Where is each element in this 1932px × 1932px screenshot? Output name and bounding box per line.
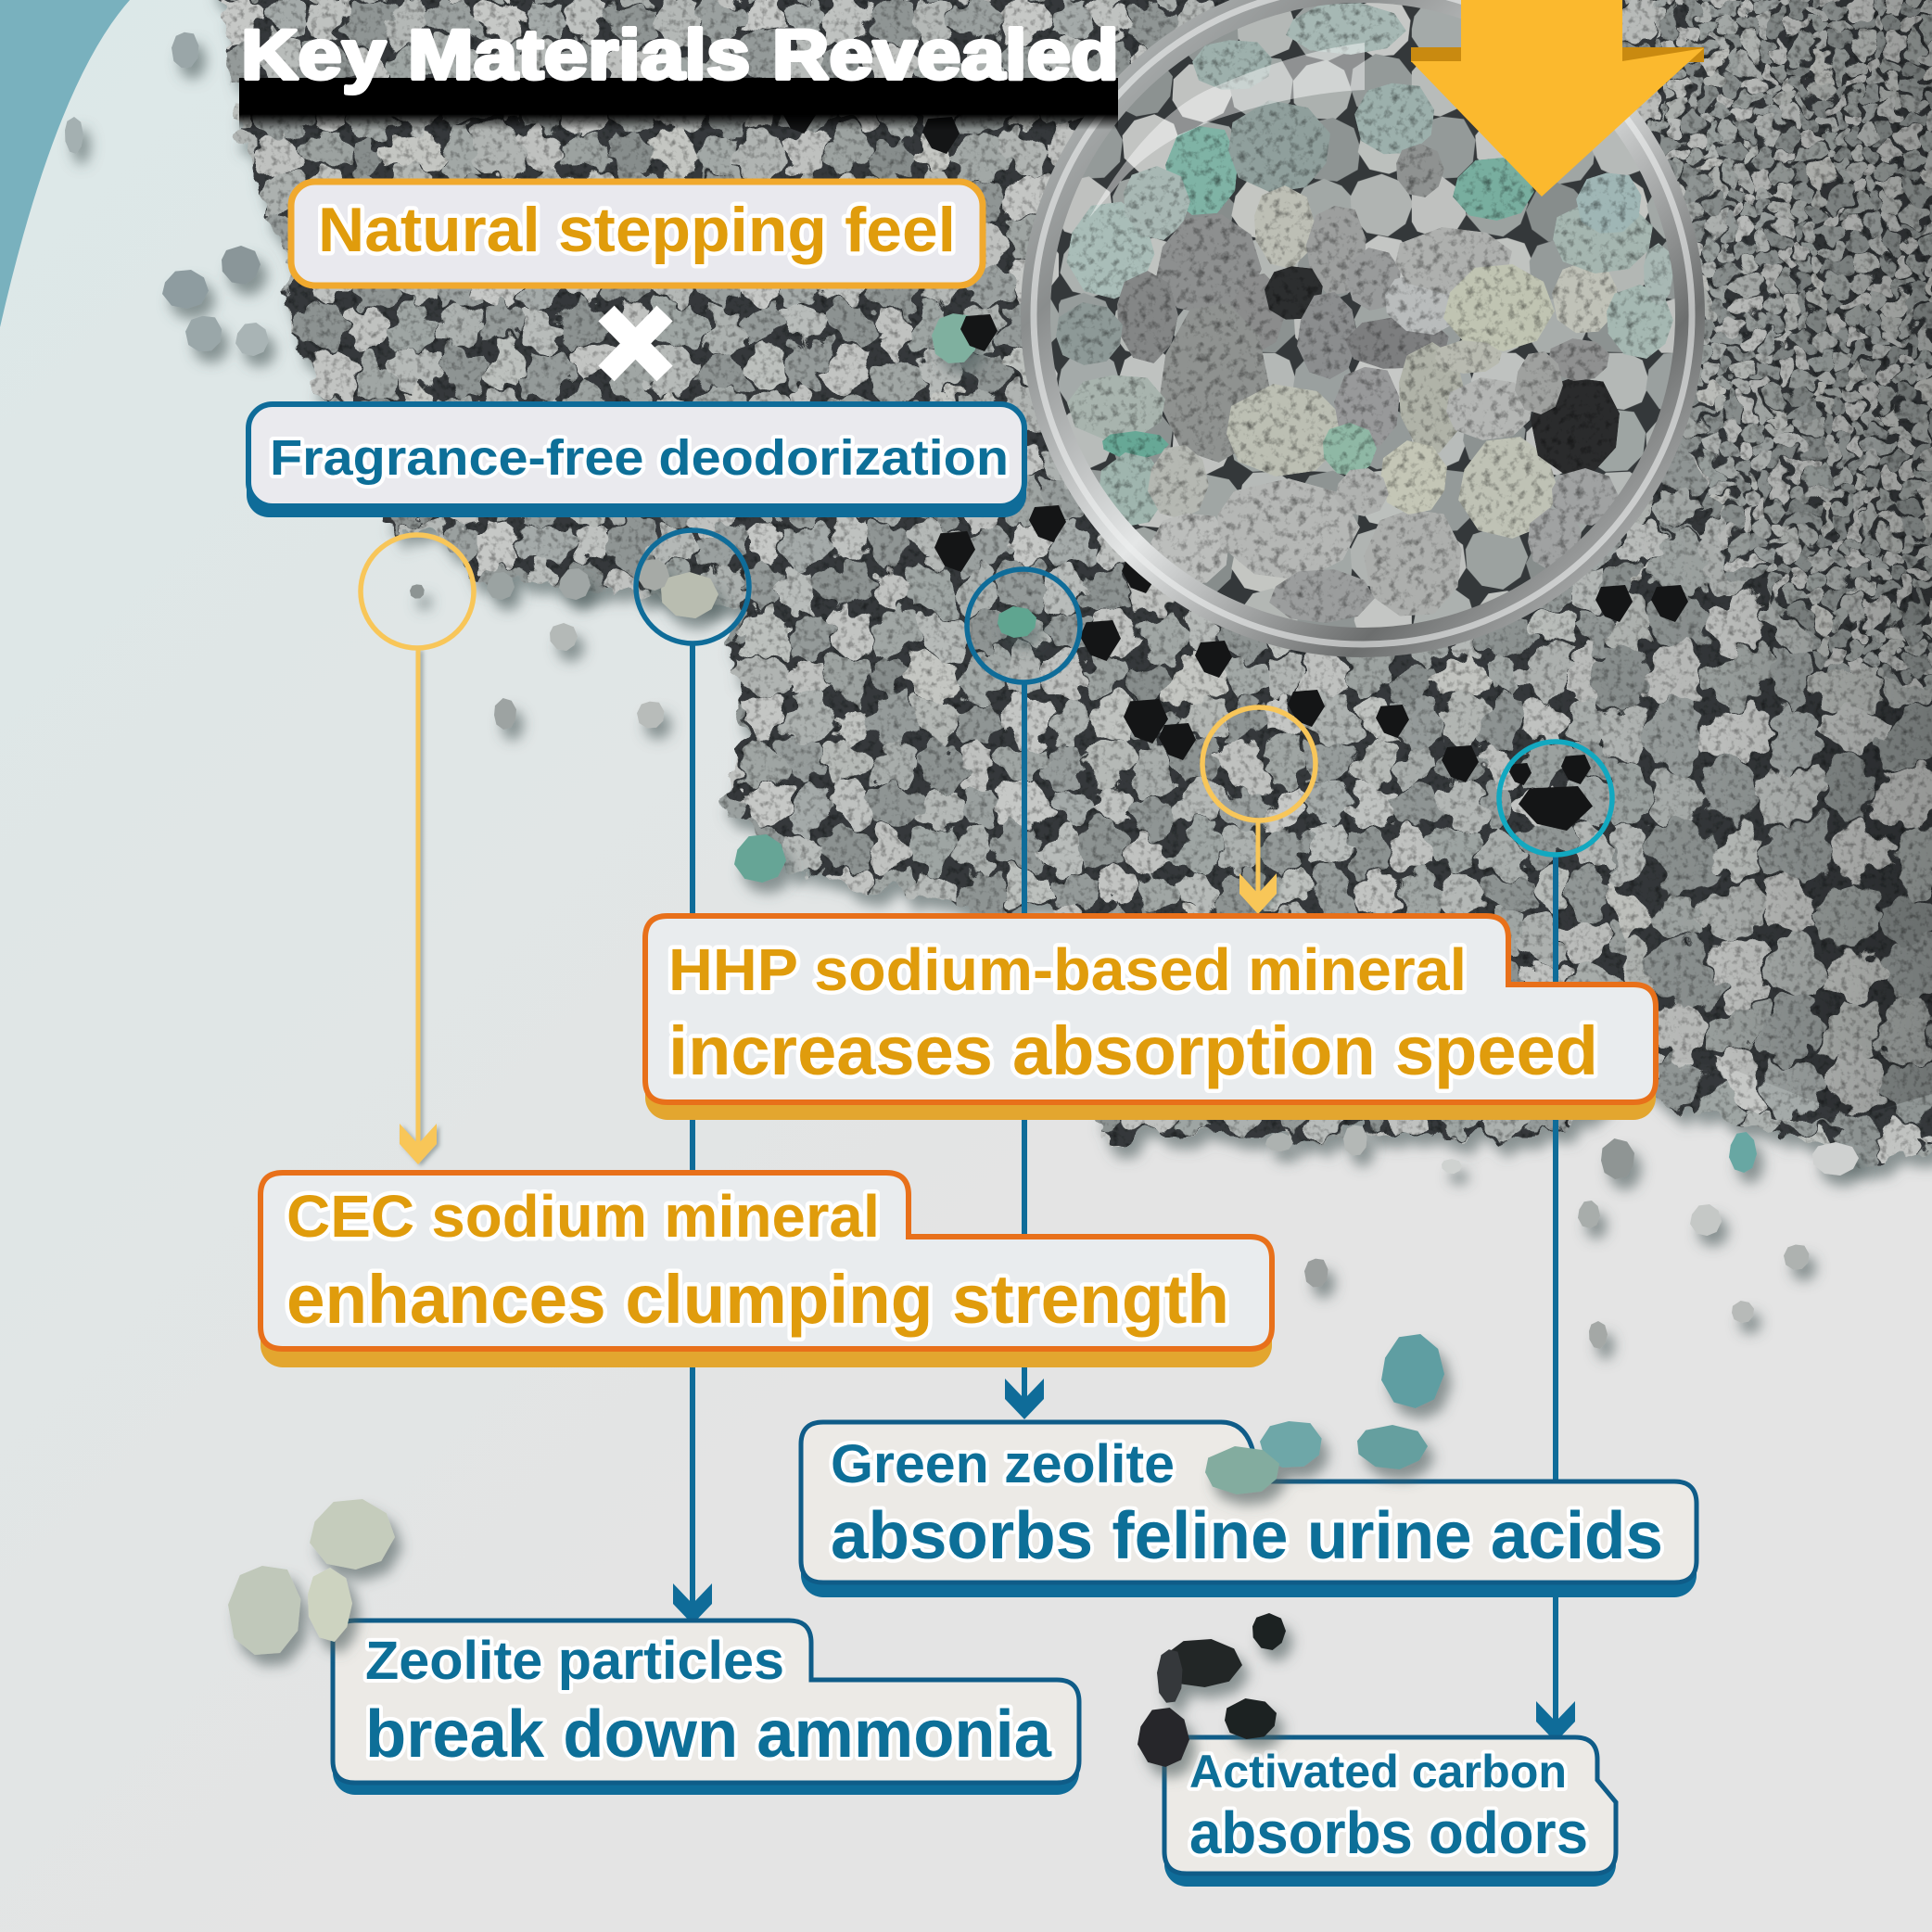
- sample stones: pale zeolite: [228, 1499, 395, 1655]
- title band: [239, 78, 1118, 130]
- sample stones: activated carbon: [1138, 1613, 1286, 1767]
- circle: zeolite marker: [636, 530, 749, 643]
- sample stones: green zeolite: [1205, 1334, 1444, 1494]
- callout: HHP sodium-based mineral: [645, 916, 1656, 1120]
- icon: multiply cross: [606, 313, 665, 374]
- callout: Zeolite particles: break down ammonia: [365, 1697, 1052, 1772]
- connector line: yellow to CEC sodium mineral: [400, 649, 437, 1164]
- circle: HHP mineral marker: [1202, 707, 1316, 820]
- pill: fragrance-free deodorization: [247, 404, 1026, 517]
- callout: Zeolite particles: Zeolite particles: [365, 1631, 784, 1691]
- title: Key Materials Revealed: [241, 16, 1119, 95]
- callout: Green zeolite: Green zeolite: [831, 1434, 1175, 1494]
- circle: CEC mineral marker: [361, 535, 474, 648]
- pill: natural stepping feel: Natural stepping feel: [318, 195, 956, 265]
- callout: CEC sodium mineral: [261, 1173, 1272, 1367]
- callout: Activated carbon: absorbs odors: [1189, 1799, 1588, 1866]
- circle: activated carbon marker: [1499, 742, 1612, 855]
- callout: Green zeolite: [801, 1422, 1697, 1597]
- gravel field: [210, 0, 1932, 1168]
- callout: HHP sodium-based mineral: increases absorption speed: [668, 1012, 1598, 1089]
- connector line: blue to Zeolite particles: [673, 644, 712, 1624]
- connector line: yellow to HHP sodium-based mineral: [1239, 820, 1277, 914]
- connector line: blue to Green zeolite: [1005, 681, 1044, 1419]
- callout: CEC sodium mineral: enhances clumping strength: [286, 1261, 1229, 1338]
- black carbon shards: [782, 100, 1688, 831]
- callout: Green zeolite: absorbs feline urine acids: [831, 1499, 1663, 1573]
- teal tray corner: [0, 0, 130, 327]
- callout: Activated carbon: Activated carbon: [1189, 1746, 1567, 1798]
- magnifier: [1029, 0, 1697, 649]
- pill: fragrance-free deodorization: Fragrance-free deodorization: [270, 430, 1009, 486]
- callout: HHP sodium-based mineral: HHP sodium-based mineral: [668, 936, 1467, 1003]
- callout: CEC sodium mineral: CEC sodium mineral: [286, 1183, 880, 1250]
- callout: Activated carbon: [1164, 1737, 1616, 1887]
- scattered stones: [65, 32, 1859, 1349]
- connector line: blue to Activated carbon: [1536, 855, 1575, 1742]
- circle: green zeolite marker: [967, 569, 1080, 682]
- callout: Zeolite particles: [333, 1621, 1079, 1795]
- pill: natural stepping feel: [291, 182, 983, 286]
- gravel darkening toward right: [1391, 0, 1932, 1117]
- marker circles: [361, 530, 1612, 855]
- yellow down arrow: [1411, 0, 1704, 197]
